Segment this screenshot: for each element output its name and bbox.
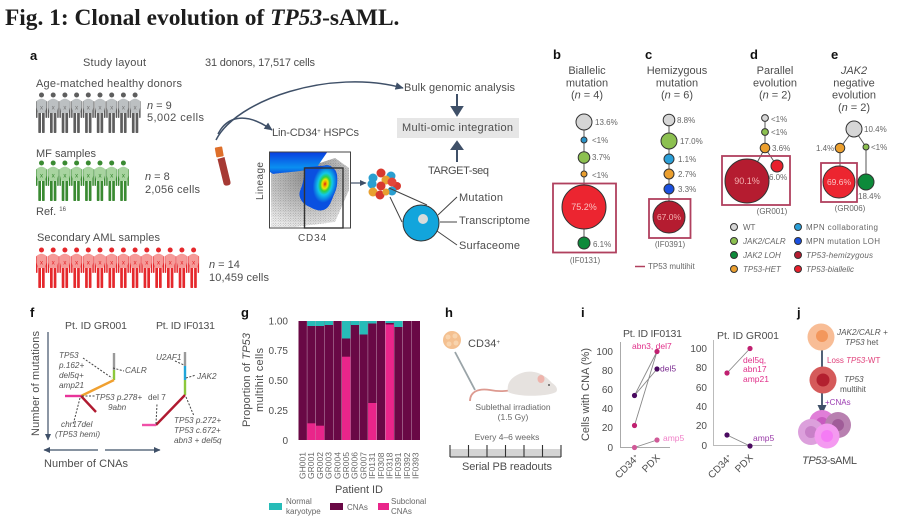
panel a: study layout xyxy=(30,48,530,288)
clone tree c: 17.0% xyxy=(680,137,703,146)
panel h: mouse xenograft xyxy=(443,305,561,473)
label: bulk genomic analysis: Bulk genomic analysis xyxy=(404,82,516,94)
tree: IF0131 xyxy=(142,352,196,425)
clone tree c: 67.0% xyxy=(657,212,681,222)
heading b: mutation xyxy=(566,77,608,89)
label: loss of TP53 WT: Loss TP53-WT xyxy=(827,356,880,365)
heading b: Biallelic xyxy=(568,65,606,77)
y axis title: Proportion of TP53 xyxy=(241,332,253,427)
single cell with modalities: Mutation xyxy=(459,192,503,204)
x axis labels: IF0131 xyxy=(367,452,377,479)
annotations: GR001: del5q+ xyxy=(59,371,84,380)
y axis ticks xyxy=(269,316,288,447)
MF samples group: Ref. xyxy=(36,206,56,218)
cell: JAK2/CALR + TP53 het xyxy=(808,324,888,350)
chart: IF0131: 100 xyxy=(596,347,613,358)
arrow: plot to cells xyxy=(351,182,366,184)
donors summary: 31 donors, 17,517 cells xyxy=(205,57,316,69)
cell: TP53 multihit xyxy=(810,366,867,394)
legend: clone types xyxy=(730,223,880,274)
x axis labels: GR004 xyxy=(332,452,342,479)
chart: IF0131: 40 xyxy=(602,404,613,415)
axis: number of CNAs xyxy=(44,450,160,470)
chart: GR001 xyxy=(690,330,779,481)
y axis ticks: 0.50 xyxy=(269,376,288,387)
panel g: stacked bar chart xyxy=(241,305,426,516)
annotations: IF0131 xyxy=(148,353,222,445)
legend: clone types: WT xyxy=(743,223,756,232)
label: TARGET-seq: TARGET-seq xyxy=(428,165,489,177)
panel a: study layout: a xyxy=(30,48,38,63)
annotations: GR001: amp21 xyxy=(59,381,84,390)
legend: clone types: JAK2 LOH xyxy=(742,251,781,260)
cell: TP53 multihit: multihit xyxy=(840,385,867,394)
annotations: GR001 xyxy=(55,351,147,439)
chart: GR001: amp5 xyxy=(753,433,775,443)
heading e: negative xyxy=(833,77,875,89)
legend: clone types: MPN collaborating xyxy=(806,223,878,232)
healthy donors group: 5,002 cells xyxy=(147,112,204,124)
chart: GR001: amp21 xyxy=(743,374,769,384)
heading e: (n = 2) xyxy=(838,102,870,114)
x axis labels: GR007 xyxy=(358,452,368,479)
clone tree c: (IF0391) xyxy=(655,240,685,249)
annotations: IF0131: JAK2 xyxy=(196,372,217,381)
legend g: Subclonal xyxy=(391,497,426,506)
healthy donors group: n = 9 xyxy=(147,100,172,112)
chart: IF0131: CD34 xyxy=(613,455,639,481)
label: CD34+: CD34 xyxy=(468,338,496,350)
secondary AML group: Secondary AML samples xyxy=(37,232,160,244)
box: multi-omic integration: Multi-omic integration xyxy=(402,122,513,134)
chart: GR001: abn17 xyxy=(743,364,767,374)
secondary AML group xyxy=(36,232,270,288)
panel i: CNA line charts: i xyxy=(581,305,585,320)
heading d: Parallel xyxy=(757,65,793,77)
label: serial readouts: Serial PB readouts xyxy=(462,461,552,473)
heading d: evolution xyxy=(753,77,797,89)
x axis labels: GR001 xyxy=(306,452,316,479)
panel f: phylogenetic trees: f xyxy=(30,305,35,320)
x axis labels: GR003 xyxy=(324,452,334,479)
legend g: CNAs xyxy=(347,503,368,512)
clone tree b: 75.2% xyxy=(571,202,597,212)
legend: clone types: JAK2/CALR xyxy=(742,237,786,246)
axis: number of mutations xyxy=(30,330,48,440)
legend g: Normal xyxy=(286,497,312,506)
icon: syringe xyxy=(455,352,475,390)
heading c: Hemizygous xyxy=(647,65,707,77)
panel g: stacked bar chart: g xyxy=(241,305,249,320)
annotations: IF0131: abn3 + del5q xyxy=(174,436,222,445)
axis: number of mutations: Number of mutations xyxy=(30,330,42,436)
y axis title: Cells with CNA (%) xyxy=(580,348,592,441)
MF samples group: 16 xyxy=(59,207,67,213)
flow cytometry plot: Lineage xyxy=(255,162,266,200)
healthy donors group xyxy=(36,78,204,133)
legend: clone types: TP53-biallelic xyxy=(806,265,854,274)
chart: GR001: 100 xyxy=(690,344,707,355)
tree: GR001 xyxy=(65,353,124,425)
y axis ticks: 0.75 xyxy=(269,346,288,357)
clone tree d xyxy=(722,115,790,216)
panel e: JAK2 negative evolution xyxy=(816,47,887,213)
y axis ticks: 0 xyxy=(282,436,288,447)
heading b: (n = 4) xyxy=(571,90,603,102)
cell cluster: TP53-sAML: TP53-sAML xyxy=(802,455,857,467)
chart: IF0131: 0 xyxy=(607,443,613,454)
panel b: biallelic mutation: b xyxy=(553,47,561,62)
chart: GR001: 0 xyxy=(701,441,707,452)
x axis labels: GH001 xyxy=(298,452,308,479)
chart: GR001: 60 xyxy=(696,383,707,394)
chart: IF0131: 60 xyxy=(602,385,613,396)
clone tree c: 2.7% xyxy=(678,170,696,179)
arrows xyxy=(821,348,823,414)
x axis title: Patient ID xyxy=(335,484,383,496)
clone tree e: (GR006) xyxy=(835,204,866,213)
annotations: IF0131: U2AF1 xyxy=(156,353,181,362)
single cell with modalities: Surfaceome xyxy=(459,240,520,252)
clone tree b: (IF0131) xyxy=(570,256,600,265)
chart: GR001: 20 xyxy=(696,421,707,432)
MF samples group: MF samples xyxy=(36,148,96,160)
clone tree b: <1% xyxy=(592,171,608,180)
clone tree d: 90.1% xyxy=(734,176,760,186)
clone tree c: 1.1% xyxy=(678,155,696,164)
label: every 4-6 weeks: Every 4–6 weeks xyxy=(475,432,539,442)
legend: TP53 multihit: TP53 multihit xyxy=(648,262,695,271)
y axis ticks: 0.25 xyxy=(269,406,288,417)
clone tree c xyxy=(649,114,703,249)
secondary AML group: 10,459 cells xyxy=(209,272,270,284)
cell: JAK2/CALR + TP53 het: TP53 het xyxy=(845,338,879,347)
chart: GR001: CD34 xyxy=(706,455,732,481)
legend g: CNAs xyxy=(391,507,412,516)
legend: clone types: TP53-hemizygous xyxy=(806,251,873,260)
bars xyxy=(298,321,420,440)
label: HSPCs: Lin-CD34 xyxy=(272,127,317,139)
chart: IF0131 xyxy=(596,328,685,481)
label: HSPCs: HSPCs xyxy=(321,127,360,139)
clone tree d: <1% xyxy=(771,128,787,137)
annotations: GR001: chr17del xyxy=(61,420,93,429)
clone tree d: 6.0% xyxy=(769,173,787,182)
arrow: to bulk analysis xyxy=(216,82,403,140)
cell: JAK2/CALR + TP53 het: JAK2/CALR + xyxy=(836,328,888,337)
chart: GR001: 40 xyxy=(696,402,707,413)
panel c: hemizygous mutation: c xyxy=(645,47,652,62)
clone tree e: 10.4% xyxy=(864,125,887,134)
panel c: hemizygous mutation xyxy=(635,47,708,271)
clone tree e: 1.4% xyxy=(816,144,834,153)
clone tree e: 69.6% xyxy=(827,177,851,187)
panel j: clonal progression model: j xyxy=(796,305,801,320)
x axis labels: IF0391 xyxy=(393,452,403,479)
legend g xyxy=(269,497,426,516)
flow cytometry plot: CD34 xyxy=(298,233,326,244)
cell cluster: TP53-sAML xyxy=(798,410,857,467)
panel d: parallel evolution xyxy=(722,47,797,216)
chart: GR001: + xyxy=(725,453,732,460)
cell cluster xyxy=(368,168,401,200)
panel h: mouse xenograft: (1.5 Gy) xyxy=(498,412,529,422)
label: +CNAs: +CNAs xyxy=(825,398,851,407)
arrow: target up xyxy=(452,142,462,162)
box: multi-omic integration xyxy=(397,118,519,138)
annotations: GR001: (TP53 hemi) xyxy=(55,430,100,439)
annotations: GR001: 9abn xyxy=(108,403,127,412)
healthy donors group: Age-matched healthy donors xyxy=(36,78,182,90)
x axis labels: IF0393 xyxy=(411,452,421,479)
clone tree b: 13.6% xyxy=(595,118,618,127)
timeline xyxy=(450,445,561,457)
arrow: bulk down xyxy=(452,94,462,115)
MF samples group: 2,056 cells xyxy=(145,184,200,196)
panel h: mouse xenograft: h xyxy=(445,305,453,320)
panel b: biallelic mutation xyxy=(553,47,618,265)
secondary AML group: n = 14 xyxy=(209,259,240,271)
panel d: parallel evolution: d xyxy=(750,47,758,62)
chart: IF0131: Pt. ID IF0131 xyxy=(623,328,682,340)
x axis labels: IF0392 xyxy=(402,452,412,479)
annotations: GR001: TP53 xyxy=(59,351,79,360)
panel f: phylogenetic trees xyxy=(30,305,222,470)
MF samples group: n = 8 xyxy=(145,171,170,183)
icon: blood tube xyxy=(215,146,231,186)
clone tree b: 3.7% xyxy=(592,153,610,162)
annotations: GR001: TP53 p.278+ xyxy=(95,393,142,402)
x axis labels: GR005 xyxy=(341,452,351,479)
title: Fig. 1: Clonal evolution of TP53-sAML. xyxy=(5,5,399,31)
heading: GR001: Pt. ID GR001 xyxy=(65,320,127,332)
chart: IF0131: + xyxy=(632,453,639,460)
cell: TP53 multihit: TP53 xyxy=(844,375,864,384)
clone tree b: 6.1% xyxy=(593,240,611,249)
chart: GR001: 80 xyxy=(696,363,707,374)
chart: IF0131: amp5 xyxy=(663,433,685,443)
chart: GR001: del5q, xyxy=(743,355,766,365)
label: HSPCs: + xyxy=(317,129,321,135)
label: CD34+: + xyxy=(496,340,500,346)
clone tree c: 3.3% xyxy=(678,185,696,194)
heading d: (n = 2) xyxy=(759,90,791,102)
axis: number of CNAs: Number of CNAs xyxy=(44,458,128,470)
icon: CD34 cells xyxy=(443,331,461,349)
heading c: (n = 6) xyxy=(661,90,693,102)
annotations: IF0131: TP53 p.272+ xyxy=(174,416,221,425)
heading e: evolution xyxy=(832,90,876,102)
flow cytometry plot xyxy=(255,152,350,244)
heading e: JAK2 xyxy=(840,65,867,77)
MF samples group xyxy=(36,148,200,218)
chart: GR001: Pt. ID GR001 xyxy=(717,330,779,342)
chart: GR001: PDX xyxy=(733,453,756,475)
chart: IF0131: abn3, del7 xyxy=(632,341,672,351)
clone tree d: <1% xyxy=(771,115,787,124)
panel e: JAK2 negative evolution: e xyxy=(831,47,838,62)
clone tree e: <1% xyxy=(871,143,887,152)
clone tree c: 8.8% xyxy=(677,116,695,125)
legend g: karyotype xyxy=(286,507,321,516)
x axis labels: IF0308 xyxy=(376,452,386,479)
annotations: GR001: p.162+ xyxy=(58,361,84,370)
single cell with modalities: Transcriptome xyxy=(459,215,530,227)
panel j: clonal progression model xyxy=(796,305,888,467)
panel i: CNA line charts xyxy=(580,305,779,481)
chart: IF0131: 20 xyxy=(602,423,613,434)
legend: clone types: TP53-HET xyxy=(743,265,782,274)
chart: IF0131: PDX xyxy=(640,453,663,475)
clone tree d: (GR001) xyxy=(757,207,788,216)
x axis labels: IF0318 xyxy=(384,452,394,479)
annotations: IF0131: del 7 xyxy=(148,393,166,402)
x axis labels: GR006 xyxy=(350,452,360,479)
clone tree e xyxy=(816,121,887,213)
x axis labels xyxy=(298,452,421,479)
single cell with modalities xyxy=(389,188,530,252)
label: irradiation: Sublethal irradiation xyxy=(475,402,551,412)
chart: IF0131: 80 xyxy=(602,366,613,377)
x axis labels: GR002 xyxy=(315,452,325,479)
panel g: stacked bar chart: multihit cells xyxy=(254,348,266,412)
heading c: mutation xyxy=(656,77,698,89)
clone tree d: 3.6% xyxy=(772,144,790,153)
annotations: GR001: CALR xyxy=(125,366,147,375)
clone tree b: <1% xyxy=(592,136,608,145)
icon: mouse xyxy=(470,372,557,401)
arrow: to HSPCs xyxy=(218,118,272,134)
chart: IF0131: del5 xyxy=(660,364,676,374)
annotations: IF0131: TP53 c.672+ xyxy=(174,426,221,435)
y axis ticks: 1.00 xyxy=(269,316,288,328)
heading: IF0131: Pt. ID IF0131 xyxy=(156,320,215,332)
legend: clone types: MPN mutation LOH xyxy=(806,237,880,246)
study layout heading: Study layout xyxy=(83,57,146,69)
clone tree b xyxy=(553,114,618,265)
clone tree e: 18.4% xyxy=(858,192,881,201)
